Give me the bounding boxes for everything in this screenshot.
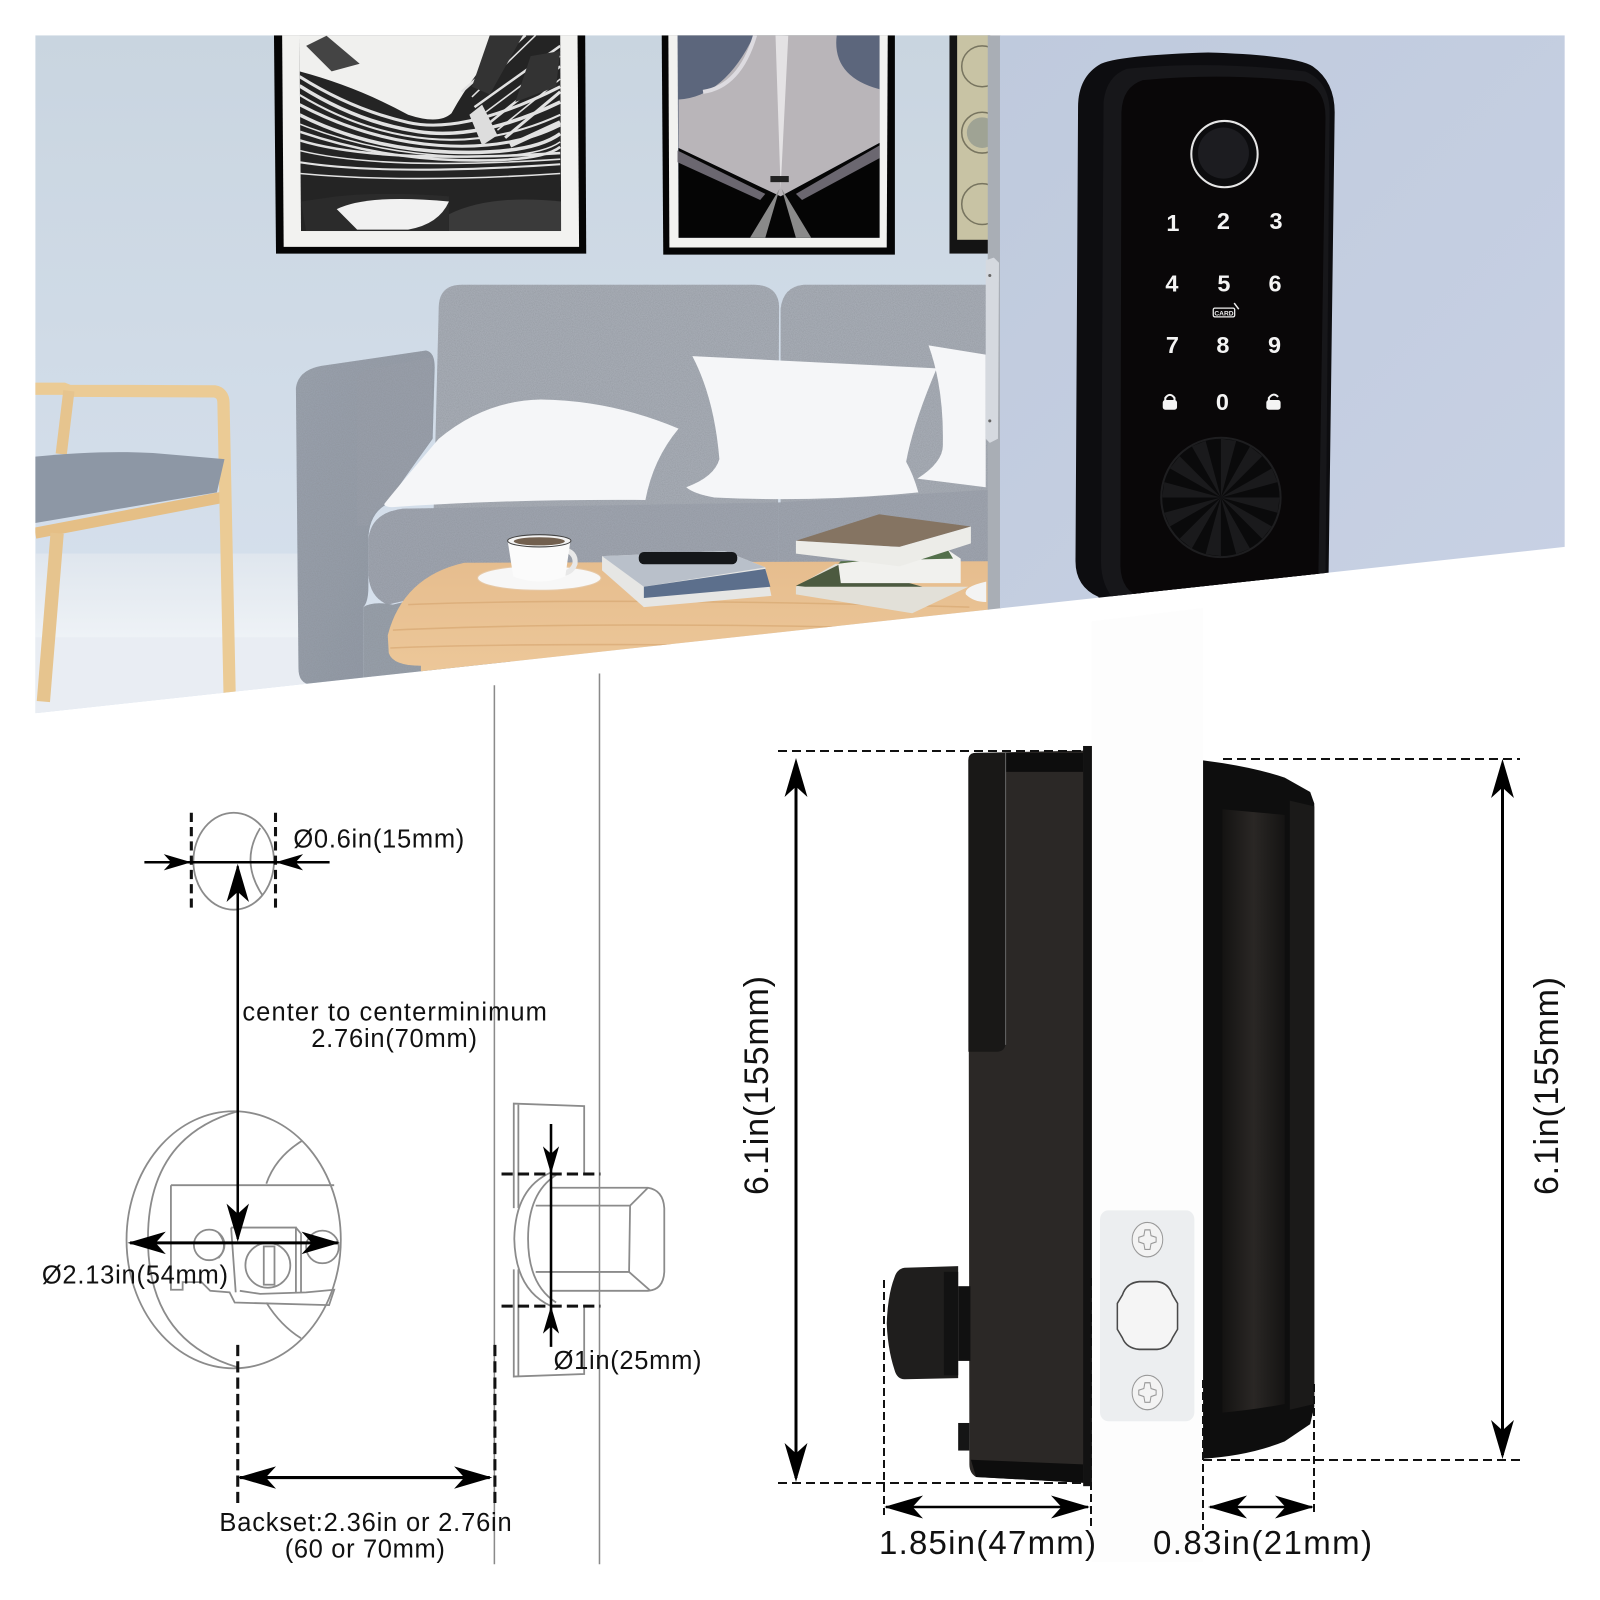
pillows	[384, 345, 986, 507]
label: interior height: 6.1in(155mm)	[738, 976, 776, 1195]
label: backset: (60 or 70mm)	[285, 1536, 445, 1564]
keypad digits: 8	[1216, 332, 1229, 358]
keypad digits: 9	[1268, 332, 1281, 358]
small hole outline	[193, 813, 274, 910]
seat cushions and base	[368, 503, 778, 605]
label: backset: Backset:2.36in or 2.76in	[219, 1509, 512, 1537]
interior unit	[968, 746, 1092, 1486]
lock housing	[1076, 53, 1335, 612]
framed picture 1	[274, 35, 586, 254]
label: 2.13in: Ø2.13in(54mm)	[42, 1262, 228, 1290]
keypad digits: 7	[1166, 332, 1179, 358]
wall right	[1000, 35, 1566, 617]
keypad digits: 4	[1165, 270, 1178, 296]
dimension: interior height	[778, 751, 1090, 1483]
lock faceplate	[1120, 77, 1325, 597]
card reader label	[1213, 303, 1239, 317]
coffee cup and saucer	[478, 535, 601, 590]
dimension: backset	[238, 1345, 495, 1504]
lock icon	[1164, 395, 1176, 409]
keypad digits: 5	[1217, 270, 1230, 296]
book and phone	[602, 551, 771, 607]
label: interior depth: 1.85in(47mm)	[879, 1524, 1096, 1561]
door edge with latch plate	[986, 35, 1001, 617]
framed picture 2	[662, 35, 895, 255]
door edge lines	[494, 673, 599, 1564]
stacked books	[796, 514, 986, 613]
dimension: 2.13in bore	[128, 1232, 340, 1254]
sofa	[296, 285, 990, 685]
label: 1in: Ø1in(25mm)	[554, 1347, 702, 1375]
door slab	[1092, 608, 1203, 1562]
label: backset	[219, 1509, 512, 1564]
keypad digits: 0	[1216, 389, 1229, 415]
exterior unit	[1203, 760, 1314, 1459]
dimension: 1in latch	[502, 1124, 601, 1347]
panel: door preparation diagram	[42, 673, 702, 1564]
thumbturn knob	[887, 1266, 970, 1451]
framed picture 3: antique map	[949, 35, 990, 254]
keypad digits	[1165, 208, 1283, 415]
wall left	[35, 35, 989, 719]
label: exterior height: 6.1in(155mm)	[1528, 977, 1566, 1195]
keypad digits: 1	[1166, 210, 1179, 236]
label: center to center: 2.76in(70mm)	[311, 1025, 477, 1053]
keypad digits: 2	[1217, 208, 1230, 234]
latch bolt drawing	[514, 1104, 664, 1377]
dimension: 0.6in hole	[144, 813, 330, 911]
label: center to center	[242, 998, 547, 1053]
baseboard and floor	[36, 554, 306, 713]
smart lock front view	[1076, 53, 1335, 612]
coffee table	[388, 561, 989, 672]
dimension: exterior height	[1203, 759, 1522, 1460]
keypad digits: 6	[1268, 270, 1282, 296]
dimension: interior depth	[884, 1278, 1091, 1530]
strike plate	[1100, 1210, 1194, 1421]
unlock icon	[1267, 395, 1280, 409]
armrest	[296, 351, 435, 685]
label: center to center: center to centerminimum	[242, 998, 547, 1026]
label: 0.6in: Ø0.6in(15mm)	[293, 825, 464, 853]
keypad digits: 3	[1269, 208, 1283, 234]
panel: side view of installed lock	[887, 608, 1314, 1562]
back cushions	[434, 285, 779, 510]
panel: lifestyle photo of living room and lock	[35, 35, 1566, 719]
card reader label: CARD	[1214, 310, 1234, 317]
dimension: center to center	[227, 864, 249, 1242]
chair	[35, 389, 230, 702]
dimension: exterior depth	[1203, 1380, 1314, 1530]
fingerprint sensor	[1191, 121, 1258, 187]
large hole outline and mechanism	[127, 1111, 341, 1368]
label: exterior depth: 0.83in(21mm)	[1153, 1524, 1372, 1561]
thumbturn cover	[1161, 438, 1281, 557]
